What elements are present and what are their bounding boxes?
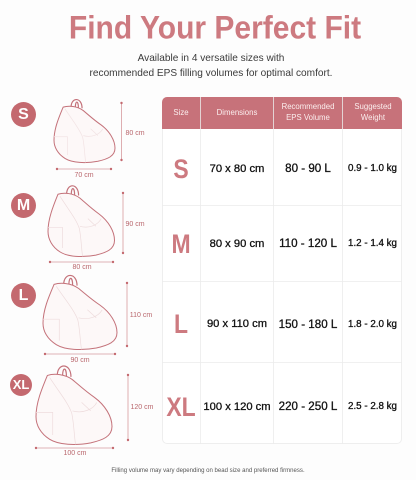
row: L: L [174,309,188,339]
dimension labels: 90 cm [70,357,90,364]
dimension labels: 110 cm [130,312,152,319]
bag L [43,275,117,350]
row: L [174,309,397,339]
badge: L [11,283,36,308]
header labels [173,102,392,122]
dimension labels: 80 cm [125,130,145,137]
row: XL: 100 x 120 cm [203,401,271,413]
badge: XL [10,374,32,396]
row: L: 1.8 - 2.0 kg [348,319,397,330]
badge: M: M [17,197,30,214]
header labels: Recommended [282,102,334,111]
header labels: Suggested [354,102,392,111]
grid lines [163,97,401,443]
row: L: 90 x 110 cm [207,318,267,330]
dimension labels: 120 cm [131,404,153,411]
header labels: EPS Volume [286,112,330,122]
row: L: 150 - 180 L [279,318,337,331]
subtitle: Available in 4 versatile sizes with [138,53,284,64]
row: S: 80 - 90 L [285,162,331,175]
header labels: Size [173,108,189,117]
bag XL [36,366,112,444]
row: XL: 2.5 - 2.8 kg [348,401,397,412]
footnote: Filling volume may vary depending on bead size and preferred firmness. [111,468,305,474]
row: S: 70 x 80 cm [210,163,264,175]
title: Find Your Perfect Fit [69,11,361,46]
dimension labels: 80 cm [72,264,92,271]
badge: S: S [18,106,29,123]
row: XL [166,392,397,422]
bag S [54,100,115,163]
row: XL: XL [166,392,196,422]
header labels: Weight [361,112,385,122]
row: S: 0.9 - 1.0 kg [348,163,397,174]
bag M [48,186,114,257]
dimension lines [36,103,128,448]
subtitle: recommended EPS filling volumes for optimal comfort. [90,68,332,78]
badge: XL: XL [13,377,29,392]
badge: M [11,193,36,218]
row: M: 80 x 90 cm [210,238,264,250]
row: M: 110 - 120 L [279,237,337,250]
badge: L: L [19,287,28,304]
row: XL: 220 - 250 L [279,400,337,413]
size table [162,97,402,444]
row: S [173,154,397,184]
row: M: 1.2 - 1.4 kg [348,238,397,249]
table header [162,97,402,129]
subtitle [90,53,332,78]
row: M [171,229,397,259]
header labels: Dimensions [217,108,257,117]
row: S: S [173,154,189,184]
row: M: M [171,229,191,259]
dimension labels: 90 cm [125,221,145,228]
dimension labels: 100 cm [64,450,86,457]
badge: S [11,102,36,127]
dimension labels: 70 cm [74,172,94,179]
